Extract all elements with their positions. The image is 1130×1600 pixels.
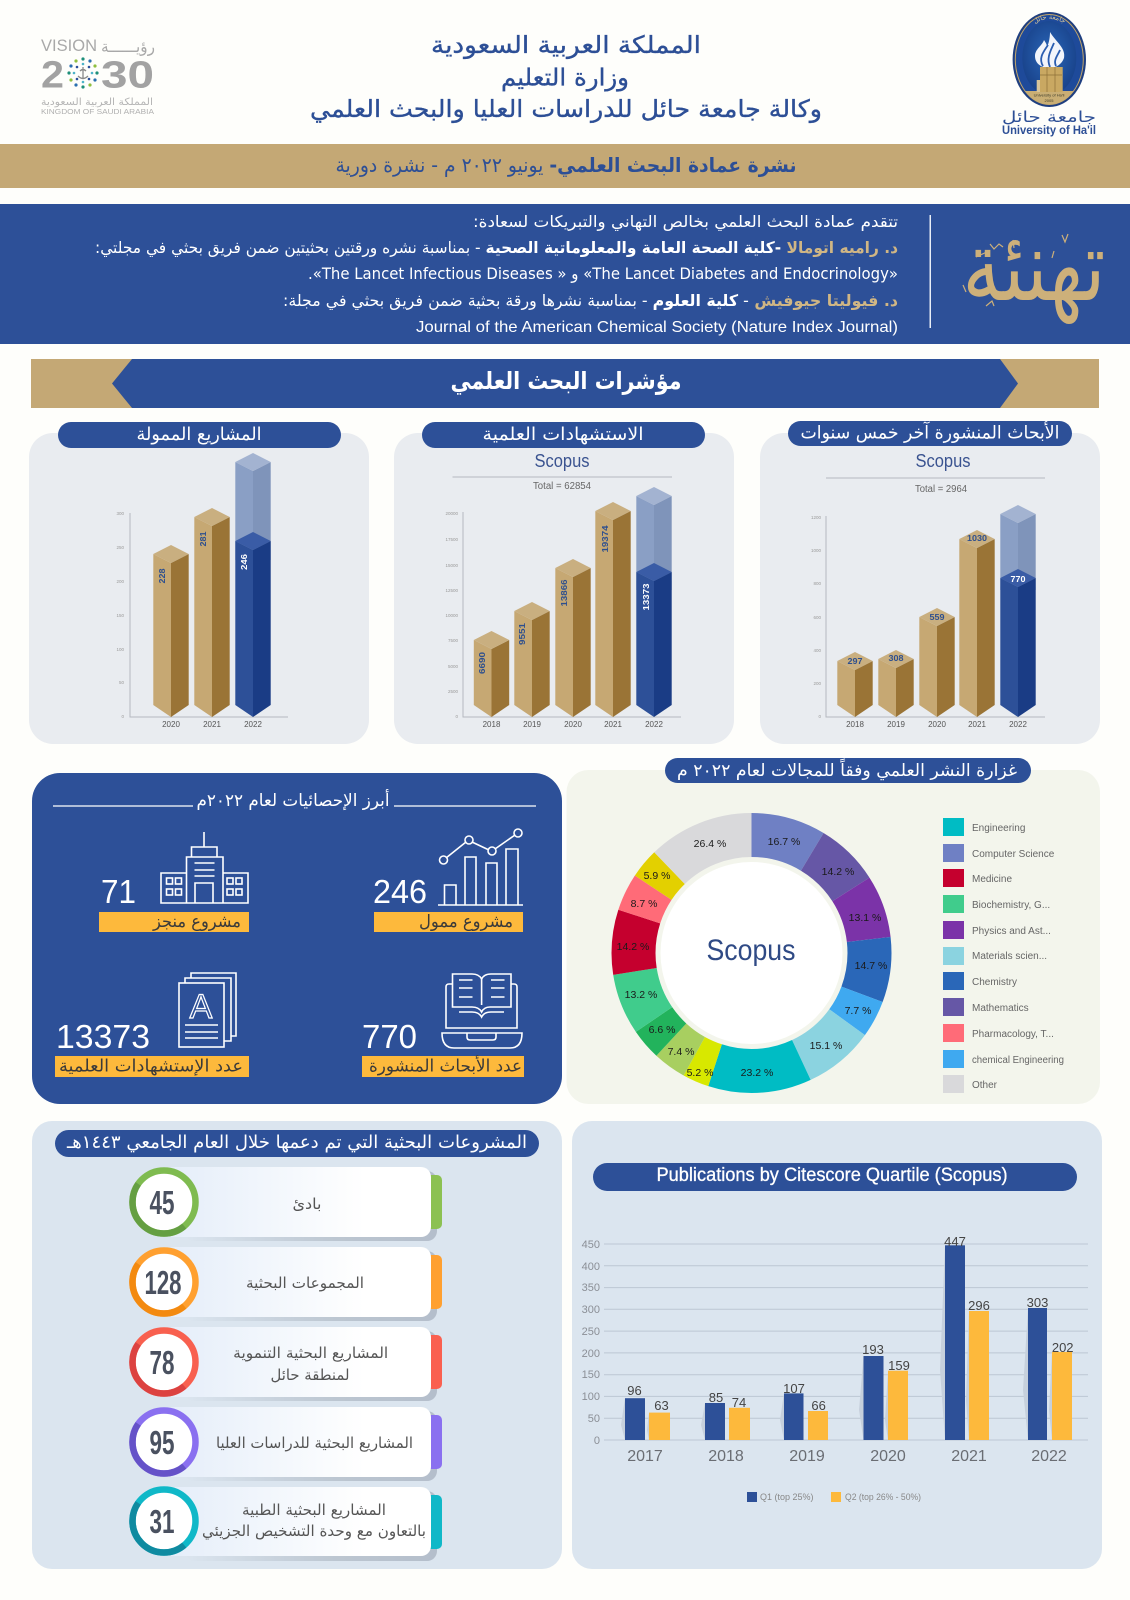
heading: supported projects: المشروعات البحثية التي تم دعمها خلال العام الجامعي ١٤٤٣هـ (66, 1132, 527, 1153)
logo: Vision 2030: 30 (101, 54, 154, 96)
heading: fields: غزارة النشر العلمي وفقاً للمجالات لعام ٢٠٢٢ م (677, 757, 1017, 781)
panel: citations chart: 12500 (445, 588, 458, 593)
panel: publications chart: 600 (813, 615, 821, 620)
donut labels: 7.7 % (845, 1005, 871, 1017)
bar chart: quartiles: 2019 (789, 1448, 825, 1465)
section heading: research indicators: مؤشرات البحث العلمي (450, 367, 682, 395)
row: Badi 45: 45 (150, 1184, 174, 1221)
row: development projects 78: لمنطقة حائل (270, 1366, 350, 1384)
panel: publications chart: 2019 (887, 720, 905, 729)
logo: University of Hail (1002, 12, 1096, 137)
title (310, 31, 822, 123)
donut labels: 13.2 % (625, 989, 657, 1001)
panel: funded projects chart: 50 (119, 680, 124, 685)
icon: documents (179, 973, 236, 1047)
donut labels: 7.4 % (668, 1046, 694, 1058)
logo: Vision 2030: المملكة العربية السعودية (41, 97, 153, 108)
bar chart: quartiles: 303 (1027, 1295, 1048, 1310)
bar chart: quartiles: 2022 (1031, 1448, 1067, 1465)
logo: University of Hail: جامعة حائل (1002, 108, 1096, 126)
bar chart: quartiles: 96 (627, 1383, 642, 1398)
panel: funded projects chart: المشاريع الممولة (136, 424, 262, 445)
stat: completed projects (99, 873, 249, 932)
title: وكالة جامعة حائل للدراسات العليا والبحث العلمي (310, 95, 822, 123)
panel: funded projects chart: 250 (116, 545, 124, 550)
bar chart: quartiles: 2021 (951, 1448, 987, 1465)
bar chart: quartiles: 150 (582, 1369, 600, 1381)
icon: book on laptop (442, 974, 522, 1048)
legend: Biochemistry, G... (972, 900, 1050, 911)
stat: citations: عدد الإستشهادات العلمية (59, 1056, 243, 1076)
panel: funded projects chart: 246 (239, 554, 249, 570)
legend: Materials scien... (972, 951, 1047, 962)
panel: citations chart: 6690 (477, 652, 487, 674)
donut labels: 14.7 % (855, 960, 887, 972)
logo: Vision 2030 (41, 36, 155, 116)
row: research groups 128: المجموعات البحثية (246, 1274, 364, 1292)
panel: publications chart: Scopus (916, 451, 970, 471)
row: Badi 45 (132, 1167, 442, 1241)
logo: Vision 2030: 2 (41, 54, 64, 96)
panel: publications chart: 200 (813, 681, 821, 686)
panel: publications by CiteScore quartile (572, 1121, 1102, 1569)
donut labels: 5.9 % (644, 870, 670, 882)
bar chart: quartiles: 2020 (870, 1448, 906, 1465)
legend: Other (972, 1080, 998, 1091)
panel: funded projects chart: 2021 (203, 720, 221, 729)
bar chart: quartiles: 193 (862, 1342, 884, 1357)
panel: citations chart: 15000 (445, 563, 458, 568)
legend: Pharmacology, T... (972, 1029, 1054, 1040)
panel: citations chart: 13373 (641, 583, 651, 610)
panel: supported research projects (32, 1121, 562, 1569)
row: medical projects 31: المشاريع البحثية الطبية (242, 1501, 386, 1519)
donut chart (634, 835, 870, 1071)
legend: Engineering (972, 823, 1025, 834)
row: research groups 128 (132, 1247, 442, 1321)
panel: publications chart: 559 (930, 612, 945, 622)
donut labels: 5.2 % (687, 1067, 713, 1079)
bar chart: quartiles: 159 (888, 1358, 910, 1373)
row: graduate projects 95: 95 (150, 1424, 174, 1461)
panel: citations chart: 2500 (448, 689, 458, 694)
stat: funded projects: مشروع ممول (419, 912, 513, 932)
donut labels: 8.7 % (631, 898, 657, 910)
panel: publications chart: 2020 (928, 720, 946, 729)
stat: funded projects (373, 873, 523, 932)
panel: citations chart: 2019 (523, 720, 541, 729)
legend: quartiles (747, 1492, 921, 1502)
legend: quartiles: Q2 (top 26% - 50%) (845, 1492, 921, 1502)
panel: funded projects chart: 150 (116, 613, 124, 618)
panel: citations chart: 2022 (645, 720, 663, 729)
stat: funded projects: 246 (373, 873, 427, 910)
panel: key statistics 2022 (32, 773, 562, 1104)
bar chart: quartiles: 447 (944, 1234, 966, 1249)
row: development projects 78: 78 (150, 1344, 174, 1381)
panel: funded projects chart: 300 (116, 511, 124, 516)
bar chart: quartiles (582, 1234, 1088, 1465)
donut labels: 14.2 % (617, 941, 649, 953)
stat: publications: عدد الأبحاث المنشورة (369, 1056, 522, 1076)
bar chart: quartiles: 107 (783, 1381, 805, 1396)
bar chart: quartiles: 202 (1052, 1340, 1074, 1355)
panel: funded projects chart (29, 422, 369, 744)
row: development projects 78 (132, 1327, 442, 1401)
row: medical projects 31 (132, 1487, 442, 1561)
panel: funded projects chart: 281 (198, 531, 208, 546)
panel: publications by field donut (566, 757, 1100, 1104)
donut labels (617, 836, 887, 1079)
bar chart: quartiles: 300 (582, 1304, 600, 1316)
legend: quartiles: Q1 (top 25%) (760, 1492, 814, 1502)
heading: quartile chart (593, 1163, 1077, 1191)
bar chart: quartiles: 350 (582, 1282, 600, 1294)
panel: publications by field donut: Scopus (706, 934, 796, 967)
legend: Physics and Ast... (972, 926, 1051, 937)
bar chart: quartiles: 50 (588, 1413, 600, 1425)
panel: publications chart: 308 (888, 653, 904, 663)
logo: Vision 2030: KINGDOM OF SAUDI ARABIA (41, 107, 154, 116)
stat: completed projects: مشروع منجز (152, 912, 241, 932)
legend: chemical Engineering (972, 1055, 1064, 1066)
panel: citations chart: 7500 (448, 638, 458, 643)
panel: funded projects chart: 2022 (244, 720, 262, 729)
row: development projects 78: المشاريع البحثية التنموية (233, 1344, 388, 1362)
panel: publications chart: 2021 (968, 720, 986, 729)
bar chart: quartiles: 0 (594, 1435, 600, 1447)
bar chart: quartiles: 450 (582, 1239, 600, 1251)
stat: completed projects: 71 (101, 873, 136, 910)
panel: citations chart: 10000 (445, 613, 458, 618)
stat: citations (55, 1018, 249, 1077)
panel: citations chart: الاستشهادات العلمية (482, 424, 644, 445)
panel: publications chart: Total = 2964 (915, 484, 967, 495)
bar chart: quartiles: 2017 (627, 1448, 663, 1465)
row: research groups 128: 128 (144, 1264, 182, 1301)
logo: University of Hail: University of Ha'il (1002, 125, 1096, 137)
panel: funded projects chart: 200 (116, 579, 124, 584)
congratulations text: د. فيوليتا جيوفيش - كلية العلوم - بمناسبة نشرها ورقة بحثية ضمن فريق بحثي في مجلة: (283, 291, 898, 311)
congratulations text: «The Lancet Diabetes and Endocrinology» و « The Lancet Infectious Diseases». (308, 264, 898, 284)
bar chart: quartiles: 63 (654, 1398, 669, 1413)
donut labels: 6.6 % (649, 1024, 675, 1036)
bar chart: quartiles: 250 (582, 1326, 600, 1338)
panel: congratulations (0, 204, 1130, 344)
panel: publications chart (760, 420, 1100, 744)
row: medical projects 31: بالتعاون مع وحدة التشخيص الجزيئي (202, 1522, 426, 1541)
panel: citations chart: Scopus (534, 451, 590, 471)
panel: publications chart: الأبحاث المنشورة آخر خمس سنوات (800, 420, 1060, 444)
bar chart: quartiles: 2018 (708, 1448, 744, 1465)
row: Badi 45: بادئ (292, 1195, 322, 1213)
bar chart: quartiles: 200 (582, 1348, 600, 1360)
stat: publications (362, 1018, 524, 1077)
panel: funded projects chart: 2020 (162, 720, 180, 729)
panel: publications chart: 800 (813, 581, 821, 586)
panel: citations chart: Total = 62854 (533, 481, 591, 492)
stat: publications: 770 (362, 1018, 417, 1055)
legend: Medicine (972, 874, 1012, 885)
panel: publications chart: 400 (813, 648, 821, 653)
stat: citations: 13373 (56, 1018, 150, 1055)
row: graduate projects 95: المشاريع البحثية للدراسات العليا (216, 1434, 413, 1452)
panel: citations chart: 5000 (448, 664, 458, 669)
panel: citations chart: 9551 (517, 623, 527, 645)
logo: University of Hail: جامعة حائل (1035, 16, 1065, 24)
panel: publications chart: 0 (818, 714, 821, 719)
panel: citations chart: 0 (455, 714, 458, 719)
congratulations text: د. راميه اتومالا -كلية الصحة العامة والمعلوماتية الصحية - بمناسبة نشره ورقتين بحثيتين ضمن فريق بحثي في مجلتي: (95, 238, 898, 258)
donut labels: 13.1 % (849, 912, 881, 924)
bar chart: quartiles: 100 (582, 1391, 600, 1403)
panel: citations chart: 2021 (604, 720, 622, 729)
panel: citations chart: 2018 (483, 720, 501, 729)
congratulations text: Journal of the American Chemical Society (Nature Index Journal) (416, 319, 898, 336)
panel: funded projects chart: 100 (116, 647, 124, 652)
logo: University of Hail: University of Ha'il (1034, 92, 1064, 98)
icon: building (161, 832, 248, 903)
panel: publications chart: 297 (848, 656, 863, 666)
donut labels: 16.7 % (768, 836, 800, 848)
icon: documents: A (190, 988, 213, 1026)
bar chart: quartiles: 85 (709, 1390, 723, 1405)
panel: publications chart: 2022 (1009, 720, 1027, 729)
panel: citations chart (394, 422, 734, 744)
logo: Vision 2030: VISION (41, 36, 97, 55)
legend (943, 818, 1064, 1093)
donut labels: 14.2 % (822, 866, 854, 878)
congratulations text (95, 212, 898, 336)
panel: publications chart: 770 (1010, 574, 1026, 584)
donut labels: 23.2 % (741, 1067, 773, 1079)
logo: Vision 2030: رؤيــــــة (101, 37, 155, 57)
heading: key statistics: أبرز الإحصائيات لعام ٢٠٢٢م (196, 789, 390, 811)
bar chart: quartiles: 66 (811, 1398, 826, 1413)
panel: citations chart: 20000 (445, 511, 458, 516)
panel: citations chart: 13866 (559, 579, 569, 606)
legend: Computer Science (972, 849, 1055, 860)
title: وزارة التعليم (501, 64, 629, 92)
heading: quartile chart: Publications by Citescore Quartile (Scopus) (656, 1165, 1008, 1186)
congratulations text: تتقدم عمادة البحث العلمي بخالص التهاني والتبريكات لسعادة: (473, 212, 898, 232)
panel: citations chart: 19374 (600, 525, 610, 552)
row: graduate projects 95 (132, 1407, 442, 1481)
banner: newsletter date: نشرة عمادة البحث العلمي- يونيو ٢٠٢٢ م - نشرة دورية (336, 153, 796, 178)
legend: Mathematics (972, 1003, 1029, 1014)
panel: citations chart: 2020 (564, 720, 582, 729)
donut labels: 26.4 % (694, 838, 726, 850)
donut labels: 15.1 % (810, 1040, 842, 1052)
panel: publications chart: 1200 (811, 515, 821, 520)
panel: publications chart: 2018 (846, 720, 864, 729)
bar chart: quartiles: 74 (732, 1395, 746, 1410)
panel: funded projects chart: 228 (157, 568, 167, 584)
legend: Chemistry (972, 977, 1017, 988)
icon: growth bar chart (438, 829, 523, 905)
panel: funded projects chart: 0 (121, 714, 124, 719)
bar chart: quartiles: 400 (582, 1261, 600, 1273)
section heading: research indicators (31, 359, 1099, 408)
panel: citations chart: 17500 (445, 537, 458, 542)
bar chart: quartiles: 296 (968, 1298, 990, 1313)
panel: publications chart: 1030 (967, 533, 987, 543)
title: المملكة العربية السعودية (431, 31, 701, 59)
panel: publications chart: 1000 (811, 548, 821, 553)
row: medical projects 31: 31 (150, 1503, 174, 1540)
logo: University of Hail: 2005 (1045, 98, 1054, 103)
banner: newsletter date (0, 144, 1130, 188)
